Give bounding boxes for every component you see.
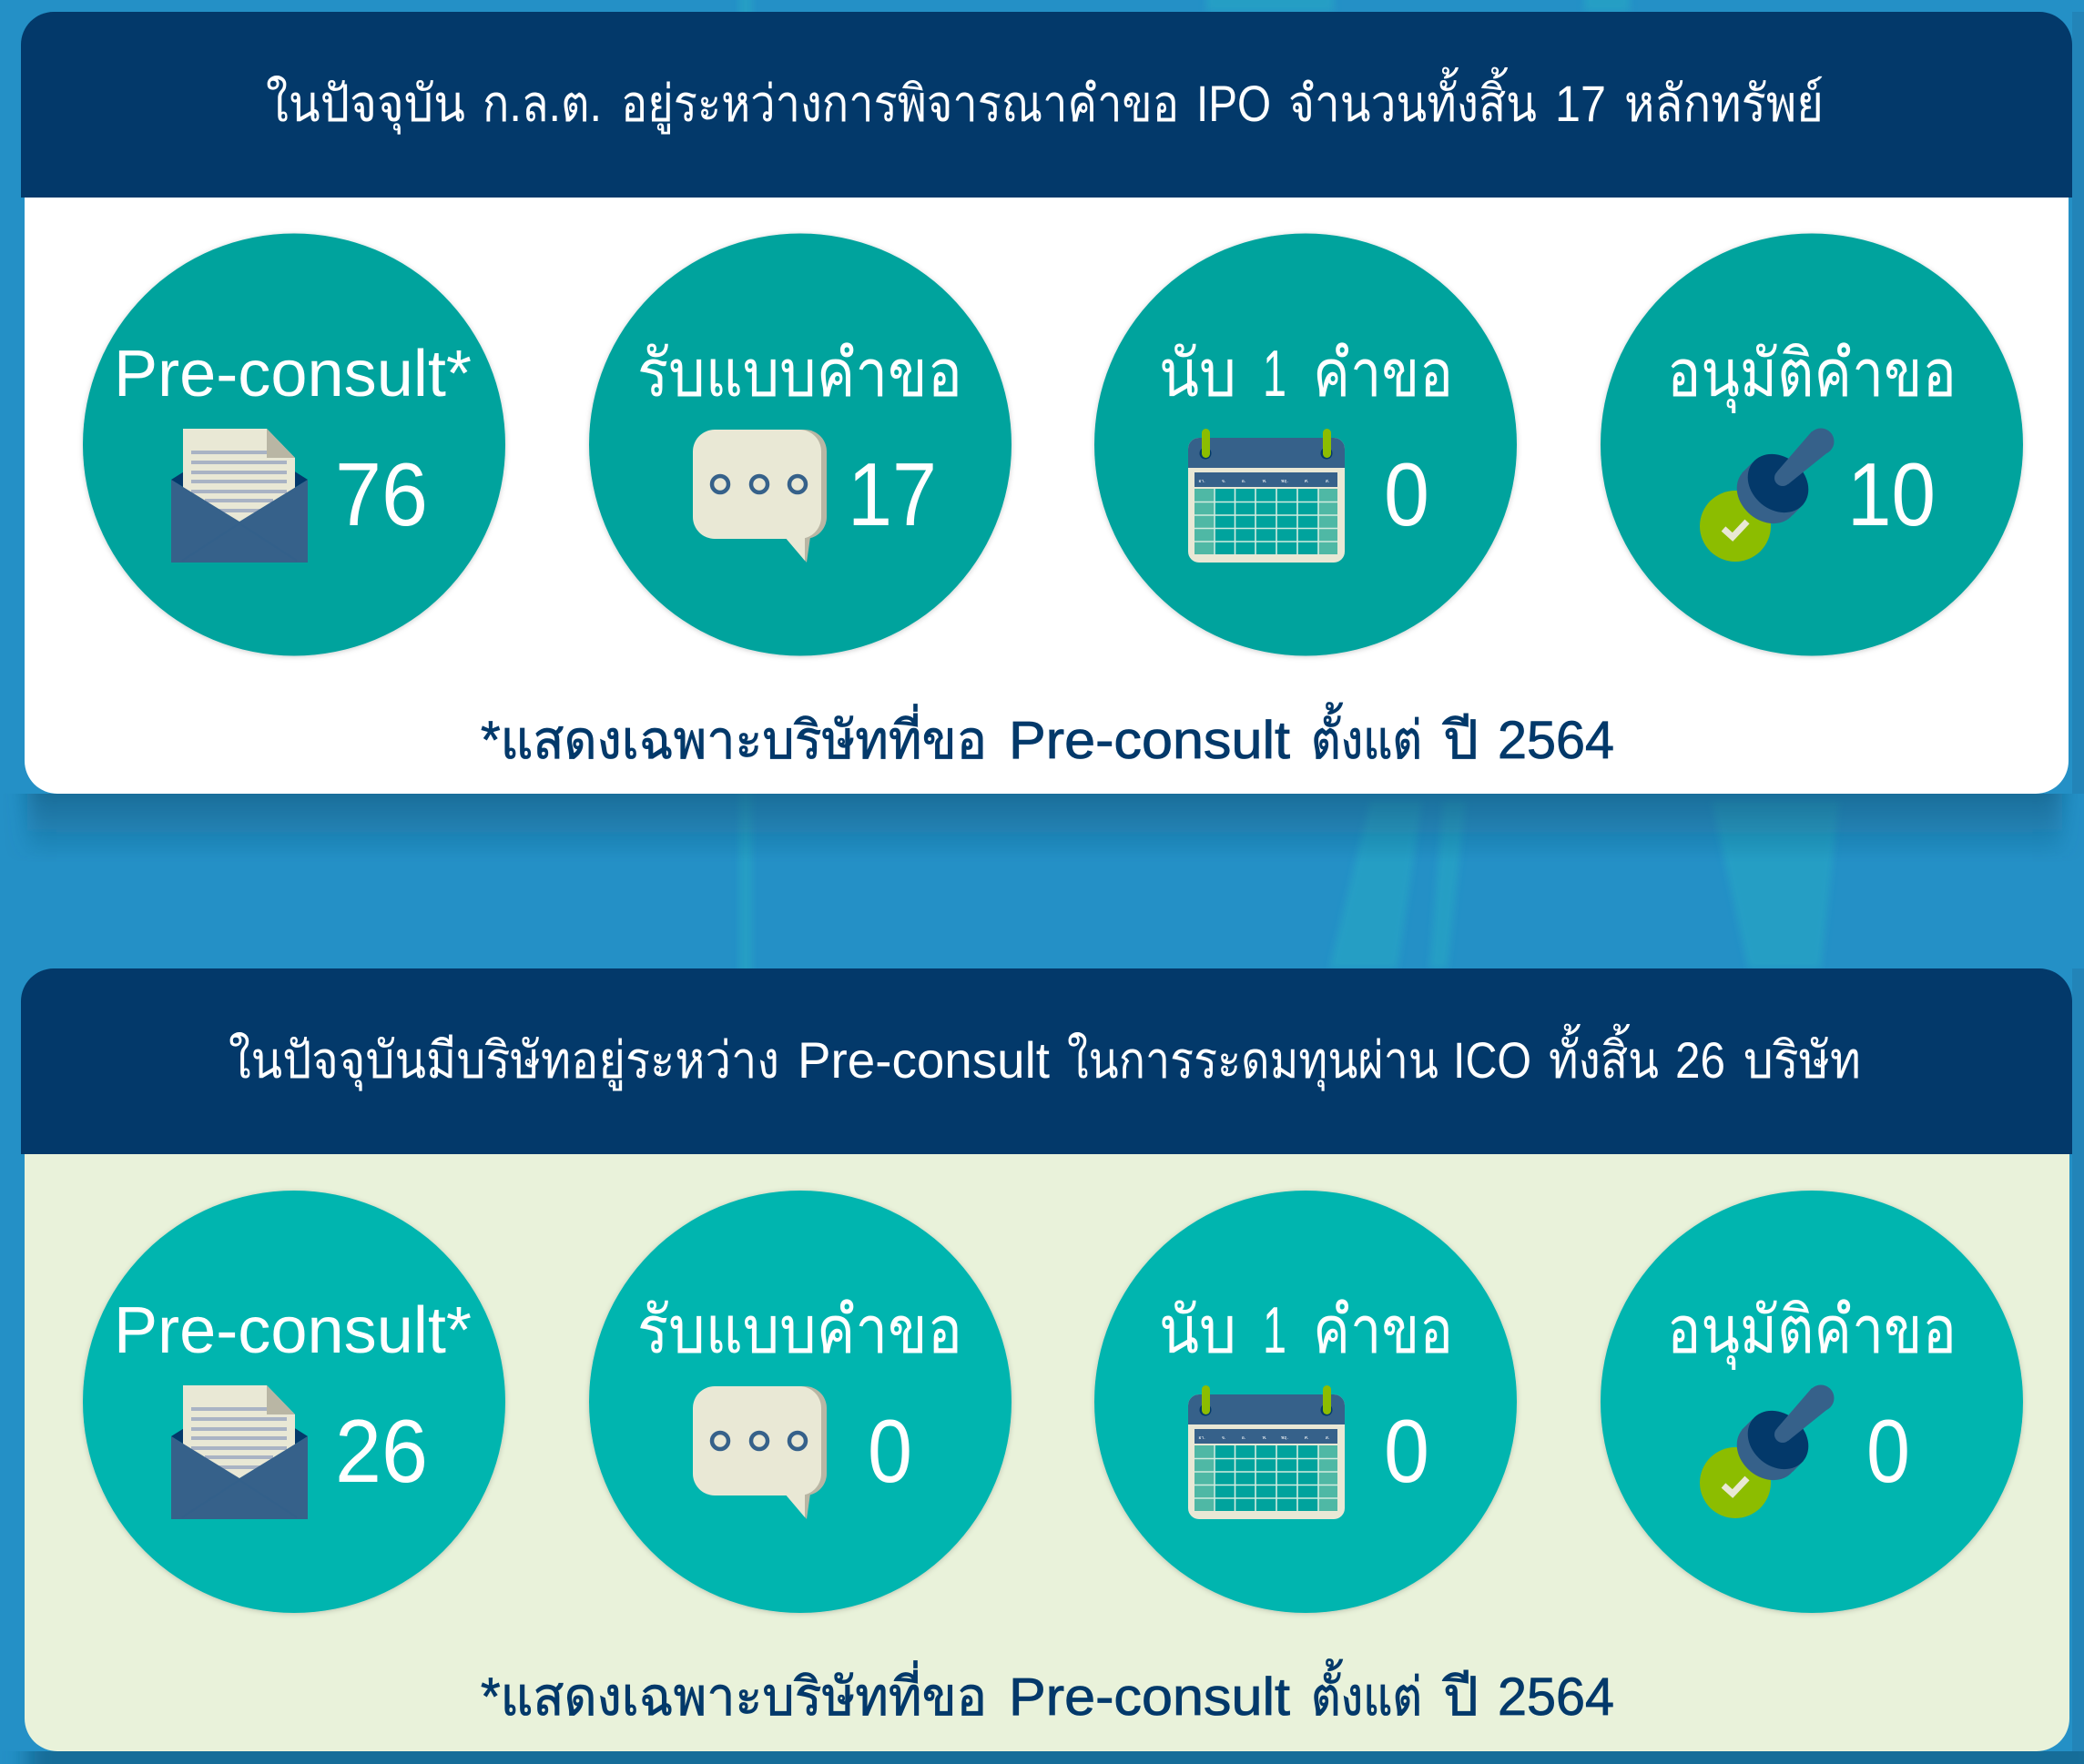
card: Pre-consult ICO — [83, 1191, 505, 1613]
footnote: IPO: ตั้งแต่ — [1311, 703, 1422, 770]
heading: ICO: ในการระดมทุนผ่าน — [1067, 1031, 1438, 1091]
icon: calendar: พ. — [1263, 1435, 1266, 1441]
card: one-count ICO: นับ — [1159, 1294, 1236, 1367]
card: application received IPO: 17 — [848, 444, 937, 544]
card: one-count ICO: 0 — [1384, 1401, 1429, 1501]
heading: IPO: 17 — [1555, 75, 1606, 132]
panel body: IPO — [25, 198, 2069, 794]
heading: IPO: IPO — [1196, 75, 1271, 132]
icon: approval stamp — [1700, 428, 1834, 562]
icon: calendar: อ. — [1242, 1435, 1245, 1441]
icon: calendar: จ. — [1222, 479, 1225, 484]
card: one-count IPO: 1 — [1263, 338, 1286, 411]
heading: ICO — [229, 1024, 1861, 1091]
card: Pre-consult IPO: Pre-consult* — [114, 338, 472, 411]
heading: ICO: บริษัท — [1743, 1031, 1861, 1089]
icon: calendar — [1188, 1385, 1345, 1519]
card: application received ICO: รับแบบคำขอ — [637, 1294, 962, 1367]
footnote: ICO: Pre-consult — [1009, 1668, 1290, 1727]
heading: ICO: ICO — [1453, 1031, 1531, 1089]
card: Pre-consult ICO: Pre-consult* — [114, 1294, 472, 1367]
heading: IPO: ในปัจจุบัน — [266, 75, 465, 135]
card: approved ICO: อนุมัติคำขอ — [1667, 1294, 1957, 1370]
card: application received IPO — [589, 233, 1012, 655]
footnote: ICO: *แสดงเฉพาะบริษัทที่ขอ — [481, 1660, 987, 1727]
panel: IPO applications — [21, 12, 2072, 794]
footnote: IPO — [481, 703, 1614, 770]
card: approved ICO: 0 — [1866, 1401, 1910, 1501]
panel header: ICO — [21, 968, 2072, 1154]
heading: ICO: 26 — [1675, 1031, 1725, 1089]
card: approved IPO: อนุมัติคำขอ — [1667, 338, 1957, 413]
footnote: ICO: ตั้งแต่ — [1311, 1659, 1422, 1727]
icon: calendar: พ. — [1263, 479, 1266, 484]
card: application received IPO: รับแบบคำขอ — [637, 338, 962, 411]
card: application received ICO — [589, 1191, 1012, 1613]
heading: ICO: ในปัจจุบันมีบริษัทอยู่ระหว่าง — [229, 1031, 779, 1091]
footnote: IPO: ปี — [1442, 711, 1479, 770]
icon: calendar: อา. — [1198, 1435, 1205, 1441]
heading: IPO: จำนวนทั้งสิ้น — [1288, 67, 1537, 132]
panel body: ICO — [25, 1154, 2069, 1751]
icon: calendar: จ. — [1222, 1435, 1225, 1441]
card: one-count IPO: คำขอ — [1313, 338, 1453, 411]
icon: speech bubble — [693, 430, 827, 563]
footnote: ICO: 2564 — [1498, 1668, 1614, 1727]
card: approved IPO: 10 — [1847, 444, 1936, 544]
card: one-count IPO: 0 — [1384, 444, 1429, 544]
footnote: ICO — [481, 1659, 1614, 1727]
icon: envelope — [171, 429, 308, 563]
footnote: IPO: *แสดงเฉพาะบริษัทที่ขอ — [481, 704, 987, 770]
icon: calendar — [1188, 429, 1345, 563]
panel header: IPO — [21, 12, 2072, 198]
icon: calendar: ศ. — [1305, 479, 1308, 484]
heading: ICO: ทั้งสิ้น — [1549, 1024, 1659, 1089]
card: one-count ICO — [1094, 1191, 1517, 1613]
card: approved IPO — [1601, 233, 2023, 655]
heading: IPO: อยู่ระหว่างการพิจารณาคำขอ — [621, 75, 1179, 135]
icon: envelope — [171, 1385, 308, 1519]
card: Pre-consult IPO: 76 — [335, 444, 428, 544]
card: one-count IPO: นับ — [1159, 338, 1236, 411]
icon: approval stamp — [1700, 1385, 1834, 1518]
heading: ICO: Pre-consult — [798, 1031, 1050, 1089]
card: one-count ICO: คำขอ — [1313, 1294, 1453, 1367]
icon: calendar: ส. — [1326, 1435, 1329, 1441]
card: one-count ICO: 1 — [1263, 1294, 1286, 1367]
footnote: IPO: Pre-consult — [1009, 711, 1290, 770]
icon: calendar: ศ. — [1305, 1435, 1308, 1441]
heading: IPO: หลักทรัพย์ — [1624, 75, 1824, 132]
card: approved ICO — [1601, 1191, 2023, 1613]
card: one-count IPO — [1094, 233, 1517, 655]
icon: calendar: พฤ. — [1281, 1435, 1288, 1441]
footnote: IPO: 2564 — [1498, 711, 1614, 770]
heading: IPO: ก.ล.ต. — [483, 75, 602, 132]
card: application received ICO: 0 — [868, 1401, 912, 1501]
card: Pre-consult ICO: 26 — [335, 1401, 428, 1501]
panel: ICO fundraising — [21, 968, 2072, 1751]
icon: calendar: อ. — [1242, 479, 1245, 484]
icon: speech bubble — [693, 1386, 827, 1519]
icon: calendar: พฤ. — [1281, 479, 1288, 484]
icon: calendar: อา. — [1198, 479, 1205, 484]
footnote: ICO: ปี — [1442, 1668, 1479, 1727]
heading: IPO — [266, 67, 1824, 135]
card: Pre-consult IPO — [83, 233, 505, 655]
icon: calendar: ส. — [1326, 479, 1329, 484]
